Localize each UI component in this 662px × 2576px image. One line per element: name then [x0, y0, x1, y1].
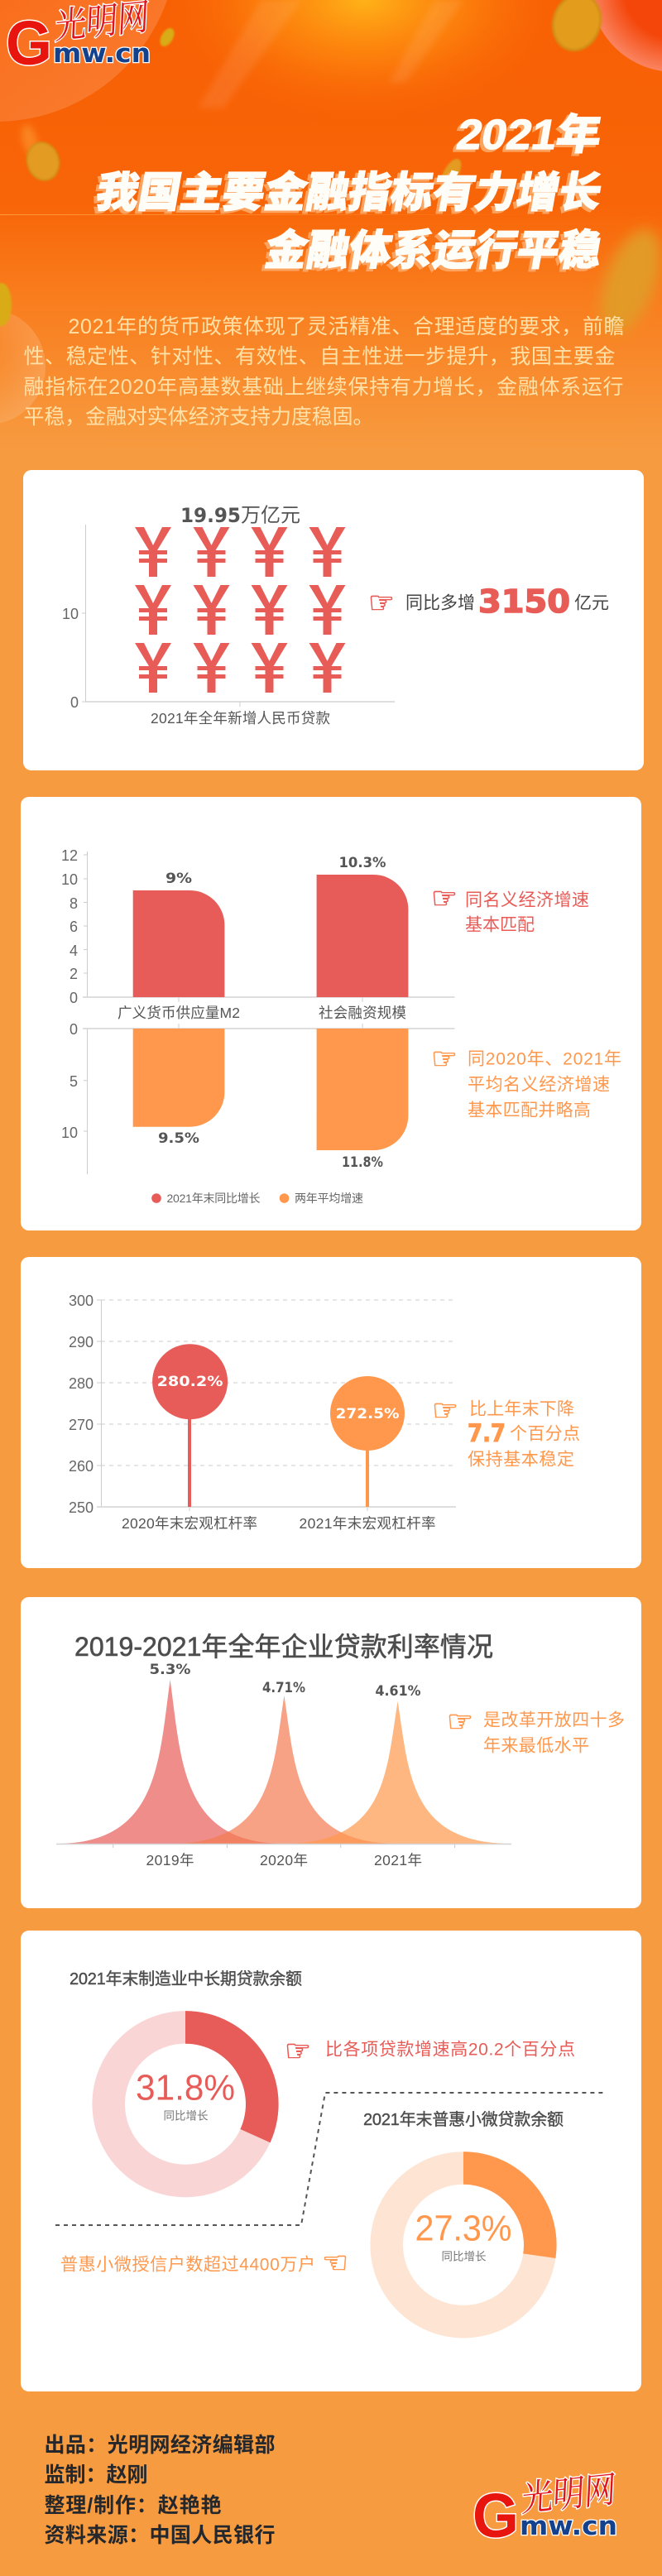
lollipop chart: 270: [69, 1417, 94, 1433]
panel: manufacturing and small-business loans: [21, 1931, 641, 2391]
intro paragraph: 性、稳定性、针对性、有效性、自主性进一步提升，我国主要金: [23, 345, 616, 368]
title: 2021年: [453, 110, 606, 158]
credits: [45, 2434, 275, 2547]
pictorial bar chart of yen symbols: 10: [62, 606, 79, 622]
logo: gmw.cn bottom: 光明网: [520, 2460, 617, 2522]
callout: 44 million borrowers: [60, 2246, 348, 2281]
credits: 监制：赵刚: [45, 2463, 147, 2487]
donut: 27.3%: 27.3%: [415, 2208, 511, 2249]
logo: gmw.cn bottom: [473, 2460, 617, 2550]
title: 金融体系运行平稳: [261, 226, 606, 274]
heading: 2019-2021年全年企业贷款利率情况: [74, 1632, 493, 1662]
donut: 31.8%: [108, 2011, 279, 2181]
heading: manufacturing loans: 2021年末制造业中长期贷款余额: [70, 1969, 302, 1988]
bar chart: year-end growth: [61, 847, 455, 1021]
lollipop chart: 2021年末宏观杠杆率: [300, 1515, 435, 1532]
callout: 同比多增3150亿元: ☞: [368, 586, 395, 621]
lollipop chart: 280.2%: [157, 1374, 223, 1390]
callout: down 7.7 points: ☞: [432, 1394, 458, 1428]
spike area chart: 5.3%: [149, 1662, 190, 1678]
title: 我国主要金融指标有力增长: [93, 168, 606, 216]
panel: macro leverage: [21, 1257, 641, 1568]
spike area chart: 2021年: [374, 1852, 422, 1868]
bar chart: year-end growth: 10.3%: [339, 855, 386, 871]
credits: 整理/制作：赵艳艳: [45, 2494, 222, 2517]
bar chart: two-year average growth: 5: [70, 1073, 78, 1090]
callout: slightly above nominal growth: ☞: [431, 1043, 458, 1076]
lollipop chart: 272.5%: [336, 1406, 399, 1422]
callout: down 7.7 points: 保持基本稳定: [468, 1450, 574, 1470]
donut: 27.3%: [386, 2151, 557, 2322]
intro paragraph: 平稳，金融对实体经济支持力度稳固。: [23, 405, 374, 429]
logo: gmw.cn top: G: [6, 8, 52, 78]
panel: new RMB loans: [23, 470, 644, 770]
intro paragraph: 融指标在2020年高基数基础上继续保持有力增长，金融体系运行: [23, 376, 624, 399]
decorative gold coins: [0, 0, 662, 341]
legend: 两年平均增速: [295, 1192, 363, 1205]
bar chart: year-end growth: 8: [70, 895, 78, 912]
callout: 同比多增3150亿元: 同比多增: [405, 594, 475, 612]
callout: lowest in 40 years: 是改革开放四十多: [483, 1711, 625, 1729]
callout: lowest in 40 years: 年来最低水平: [483, 1736, 589, 1756]
callout: down 7.7 points: [432, 1394, 580, 1470]
callout: lowest in 40 years: ☞: [447, 1705, 473, 1739]
donut: 31.8%: 同比增长: [164, 2110, 209, 2122]
callout: matches nominal growth: 同名义经济增速: [465, 890, 589, 910]
logo: gmw.cn top: mw.cn: [53, 39, 151, 69]
bar chart: two-year average growth: 9.5%: [158, 1130, 199, 1147]
bar chart: two-year average growth: 11.8%: [342, 1154, 383, 1171]
callout: matches nominal growth: 基本匹配: [465, 915, 535, 935]
lollipop chart: 260: [69, 1458, 94, 1475]
lollipop chart: 250: [69, 1499, 94, 1516]
callout: slightly above nominal growth: 平均名义经济增速: [468, 1076, 610, 1094]
intro paragraph: 2021年的货币政策体现了灵活精准、合理适度的要求，前瞻: [68, 315, 624, 338]
callout: 44 million borrowers: 普惠小微授信户数超过4400万户: [60, 2256, 315, 2274]
callout: 20.2 points higher: [285, 2034, 575, 2069]
bar chart: year-end growth: 12: [61, 847, 78, 864]
callout: matches nominal growth: [431, 882, 589, 935]
value label: 19.95万亿元: [180, 504, 300, 527]
intro paragraph: [23, 315, 624, 429]
credits: 出品：光明网经济编辑部: [45, 2434, 275, 2457]
callout: 同比多增3150亿元: 亿元: [574, 594, 609, 612]
heading: small-business loans: 2021年末普惠小微贷款余额: [363, 2110, 564, 2129]
lollipop chart: 290: [69, 1334, 94, 1350]
value label: 19.95万亿元: 19.95: [180, 504, 241, 527]
bar chart: two-year average growth: [61, 1021, 455, 1174]
lollipop chart: 300: [69, 1293, 94, 1309]
logo: gmw.cn bottom: mw.cn: [520, 2511, 617, 2541]
pictorial bar chart of yen symbols: 0: [70, 694, 79, 711]
bar chart: year-end growth: 社会融资规模: [319, 1005, 406, 1021]
callout: lowest in 40 years: [447, 1705, 625, 1756]
title: [93, 110, 606, 274]
header background: [0, 0, 662, 451]
bar chart: year-end growth: 0: [70, 990, 78, 1006]
bar chart: year-end growth: 广义货币供应量M2: [118, 1005, 240, 1021]
spike area chart: 4.61%: [376, 1683, 420, 1700]
bar chart: year-end growth: 6: [70, 919, 78, 935]
spike area chart: 2020年: [260, 1852, 308, 1868]
spike area chart: 4.71%: [262, 1680, 305, 1696]
callout: slightly above nominal growth: 同2020年、2021年: [468, 1049, 621, 1069]
value label: 19.95万亿元: 万亿元: [241, 505, 300, 526]
logo: gmw.cn top: [6, 0, 151, 78]
callout: 20.2 points higher: 比各项贷款增速高20.2个百分点: [325, 2041, 575, 2059]
logo: gmw.cn bottom: G: [473, 2481, 519, 2550]
bar chart: year-end growth: 10: [61, 871, 78, 888]
bar chart: two-year average growth: 0: [70, 1021, 78, 1038]
callout: 同比多增3150亿元: 3150: [478, 583, 570, 620]
callout: down 7.7 points: 比上年末下降: [469, 1400, 574, 1418]
callout: 44 million borrowers: ☜: [322, 2246, 348, 2281]
donut: 31.8%: 31.8%: [136, 2067, 235, 2108]
panel: M2 and social financing: [21, 797, 641, 1230]
bar chart: year-end growth: 9%: [166, 871, 192, 887]
lollipop chart: [69, 1293, 456, 1532]
panel: corporate loan rates: [21, 1597, 641, 1908]
pictorial bar chart of yen symbols: 2021年全年新增人民币贷款: [151, 710, 330, 727]
callout: 同比多增3150亿元: [368, 583, 609, 621]
bar chart: two-year average growth: 10: [61, 1125, 78, 1141]
lollipop chart: 2020年末宏观杠杆率: [122, 1515, 257, 1532]
callout: matches nominal growth: ☞: [431, 882, 458, 915]
callout: down 7.7 points: 7.7: [468, 1419, 506, 1447]
spike area chart: 2019年: [146, 1852, 194, 1868]
bar chart: year-end growth: 2: [70, 966, 78, 982]
spike area chart: [56, 1662, 511, 1868]
callout: down 7.7 points: 个百分点: [510, 1425, 580, 1443]
callout: slightly above nominal growth: 基本匹配并略高: [468, 1101, 591, 1120]
legend: [151, 1192, 363, 1205]
pictorial bar chart of yen symbols: [62, 525, 395, 727]
donut: 27.3%: 同比增长: [442, 2251, 487, 2262]
callout: slightly above nominal growth: [431, 1043, 621, 1120]
lollipop chart: 280: [69, 1375, 94, 1392]
callout: 20.2 points higher: ☞: [285, 2034, 311, 2069]
bar chart: year-end growth: 4: [70, 943, 78, 959]
credits: 资料来源：中国人民银行: [45, 2524, 275, 2547]
legend: 2021年末同比增长: [167, 1192, 260, 1205]
